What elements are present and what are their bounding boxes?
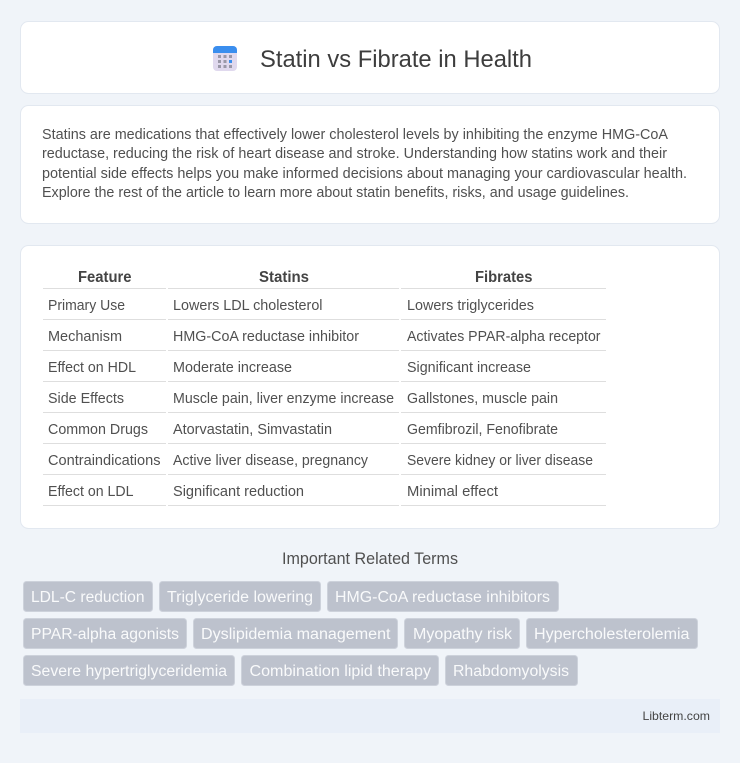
tag group: related terms [24, 582, 698, 686]
table row: common drugs: Gemfibrozil, Fenofibrate [407, 422, 558, 438]
tag: Combination lipid therapy [242, 656, 438, 686]
tag: Triglyceride lowering [160, 582, 320, 612]
tag: PPAR-alpha agonists: PPAR-alpha agonists [31, 626, 179, 643]
table row: effect on HDL: Moderate increase [173, 360, 292, 376]
table row: effect on LDL: Effect on LDL [48, 484, 134, 500]
tag: Severe hypertriglyceridemia: Severe hypertriglyceridemia [31, 663, 227, 680]
table row: mechanism: Activates PPAR-alpha receptor [407, 329, 601, 345]
table row: contraindications: Contraindications [48, 453, 160, 469]
table row: primary use: Lowers LDL cholesterol [173, 298, 322, 314]
table header row: Statins [259, 269, 309, 286]
tag: Combination lipid therapy: Combination lipid therapy [250, 663, 431, 680]
tag: Rhabdomyolysis: Rhabdomyolysis [453, 663, 569, 680]
tag: LDL-C reduction: LDL-C reduction [31, 589, 144, 606]
tag: HMG-CoA reductase inhibitors [328, 582, 558, 612]
panel: introduction [20, 106, 720, 224]
text block: introduction: reductase, reducing the risk of heart disease and stroke. Understanding how statins work and their [42, 145, 667, 162]
table row: side effects [43, 391, 606, 413]
heading: related terms: Important Related Terms [282, 550, 458, 568]
table header row: Feature [78, 269, 132, 286]
table row: effect on LDL: Minimal effect [407, 484, 498, 500]
table row: side effects: Side Effects [48, 391, 124, 407]
table row: primary use: Primary Use [48, 298, 125, 314]
table row: common drugs: Atorvastatin, Simvastatin [173, 422, 332, 438]
panel: comparison table [20, 246, 720, 528]
table row: mechanism [43, 329, 606, 351]
table row: effect on HDL [43, 360, 606, 382]
text block: introduction: potential side effects helps you make informed decisions about managing your cardiovascular health. [42, 165, 687, 182]
table row: contraindications: Severe kidney or liver disease [407, 453, 593, 469]
tag: Myopathy risk: Myopathy risk [413, 626, 512, 643]
table row: mechanism: HMG-CoA reductase inhibitor [173, 329, 359, 345]
table row: effect on LDL: Significant reduction [173, 484, 304, 500]
table row: primary use [43, 298, 606, 320]
tag: LDL-C reduction [24, 582, 152, 612]
table header row [43, 269, 606, 289]
table row: common drugs [43, 422, 606, 444]
tag: Severe hypertriglyceridemia [24, 656, 234, 686]
table header row: Fibrates [475, 269, 533, 286]
tag: Triglyceride lowering: Triglyceride lowering [167, 589, 313, 606]
panel: header [20, 22, 720, 94]
text block: introduction [42, 126, 687, 201]
table row: side effects: Muscle pain, liver enzyme increase [173, 391, 394, 407]
icon: calendar [213, 46, 237, 71]
table row: side effects: Gallstones, muscle pain [407, 391, 558, 407]
table row: contraindications: Active liver disease, pregnancy [173, 453, 369, 469]
table row: effect on HDL: Effect on HDL [48, 360, 136, 376]
table row: common drugs: Common Drugs [48, 422, 148, 438]
tag: Dyslipidemia management: Dyslipidemia management [201, 626, 391, 643]
tag: PPAR-alpha agonists [24, 618, 186, 648]
table row: effect on LDL [43, 484, 606, 506]
tag: Hypercholesterolemia: Hypercholesterolemia [534, 626, 690, 643]
footer credit: Libterm.com [642, 709, 710, 723]
title: Statin vs Fibrate in Health [260, 46, 532, 73]
table row: contraindications [43, 453, 606, 475]
tag: Dyslipidemia management [194, 618, 398, 648]
tag: Rhabdomyolysis [446, 656, 578, 686]
tag: HMG-CoA reductase inhibitors: HMG-CoA reductase inhibitors [335, 589, 550, 606]
table row: mechanism: Mechanism [48, 329, 122, 345]
text block: introduction: Explore the rest of the article to learn more about statin benefits, risks, and usage guidelines. [42, 184, 629, 201]
text block: introduction: Statins are medications that effectively lower cholesterol levels by inhibiting the enzyme HMG-CoA [42, 126, 668, 143]
footer [20, 699, 720, 733]
table row: effect on HDL: Significant increase [407, 360, 531, 376]
tag: Myopathy risk [404, 618, 520, 648]
table row: primary use: Lowers triglycerides [407, 298, 534, 314]
tag: Hypercholesterolemia [526, 618, 698, 648]
